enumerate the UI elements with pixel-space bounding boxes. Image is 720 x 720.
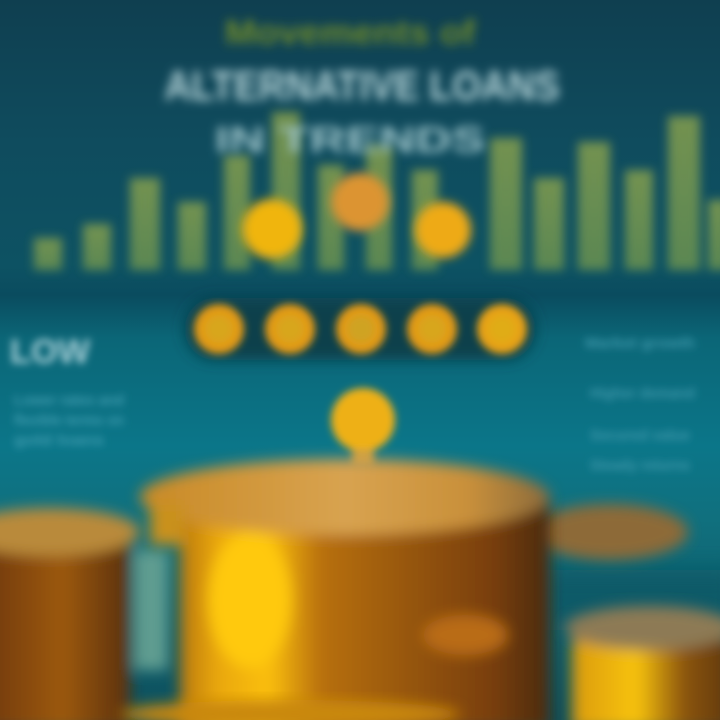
row of coins [185,298,535,360]
title: Movements of [225,14,476,52]
left text block: LOW [10,333,91,371]
main gold cup [140,459,550,720]
right text block [585,335,695,474]
title: ALTERNATIVE LOANS [164,62,560,109]
central coin [331,388,395,466]
title: IN TRENDS [215,119,485,160]
chart coins [242,173,471,259]
right text block: Secured value [590,427,690,444]
right text block: Higher demand [590,385,695,402]
small saucer right [532,504,688,560]
coin halos [185,298,535,360]
left text block: gold loans [14,432,104,449]
left text block: flexible terms on [14,412,124,429]
left text block: Lower rates and [14,392,124,409]
left gold cup [0,508,168,720]
bottom gold stack [120,700,460,720]
right text block: Steady returns [590,457,690,474]
right gold cup [565,606,720,720]
left text block [10,333,124,449]
background dark teal band near bottom [540,570,720,630]
right text block: Market growth [585,335,695,352]
title [164,14,560,160]
bar chart [34,112,720,270]
